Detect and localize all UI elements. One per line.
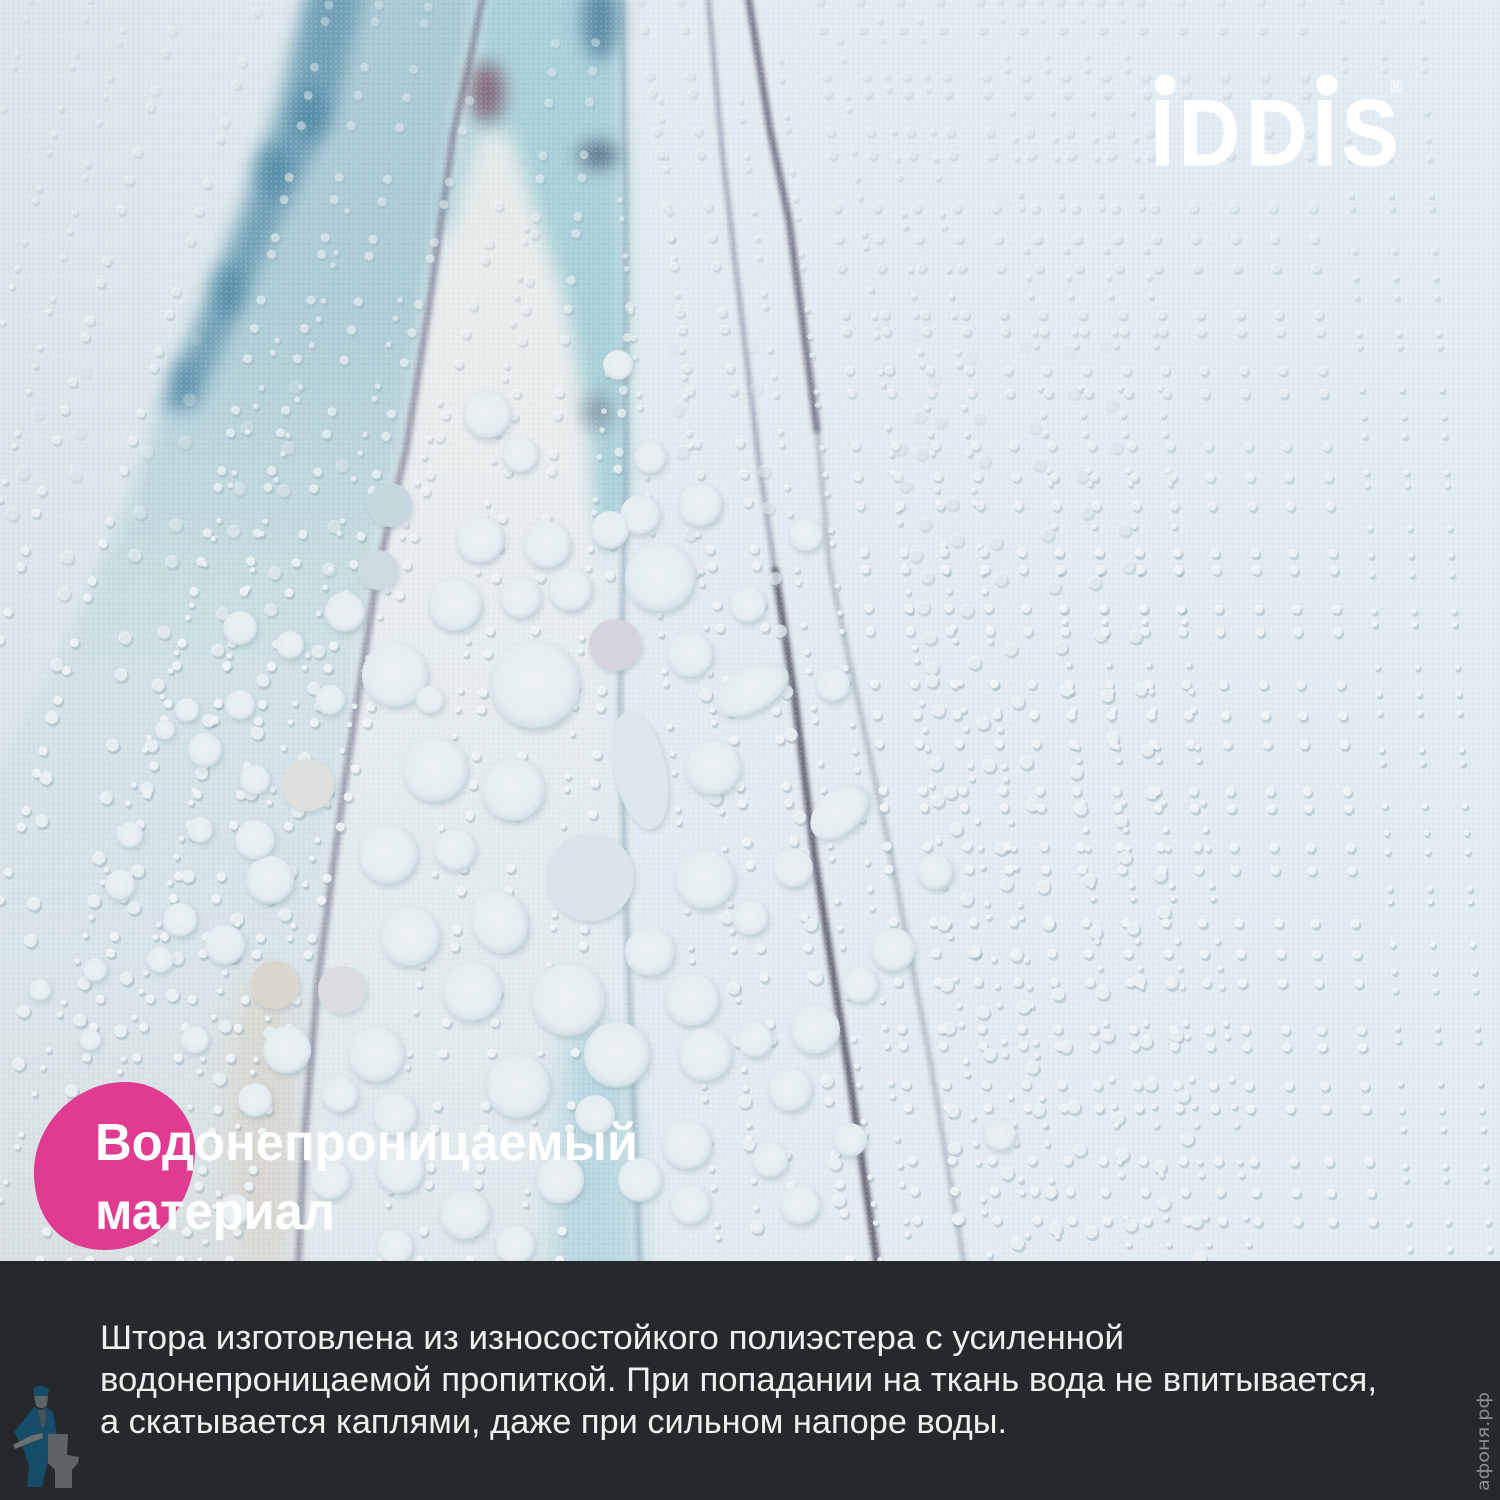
rose and grey blotches: [470, 0, 618, 430]
wedge band: [0, 0, 483, 1290]
icon: plumber with toilet: [13, 1386, 79, 1488]
description text: [100, 1319, 1377, 1441]
dark blue strip in wedge: [160, 0, 370, 410]
teal band: [440, 0, 628, 560]
heading: [95, 1114, 638, 1241]
cream band: [298, 130, 610, 1290]
lower teal band: [548, 1030, 642, 1290]
dark blue blotches: [173, 89, 328, 402]
warm tint lower left: [228, 970, 296, 1270]
description text: а скатывается каплями, даже при сильном напоре воды.: [100, 1403, 1007, 1441]
description text: Штора изготовлена из износостойкого полиэстера с усиленной: [100, 1319, 1124, 1357]
large water droplets: [29, 350, 1016, 1265]
description text: водонепроницаемой пропиткой. При попадании на ткань вода не впитывается,: [100, 1361, 1377, 1399]
vertical lines: [298, 0, 965, 1270]
bottom panel: [0, 1261, 1500, 1500]
pink blob: [34, 1082, 195, 1250]
logo: IDDIS: IDDIS: [1150, 80, 1398, 185]
logo: IDDIS: ®: [1390, 77, 1403, 96]
heading: Водонепроницаемый: [95, 1114, 638, 1172]
watermark: афоня.рф: [1474, 1392, 1494, 1491]
heading: материал: [95, 1183, 335, 1241]
